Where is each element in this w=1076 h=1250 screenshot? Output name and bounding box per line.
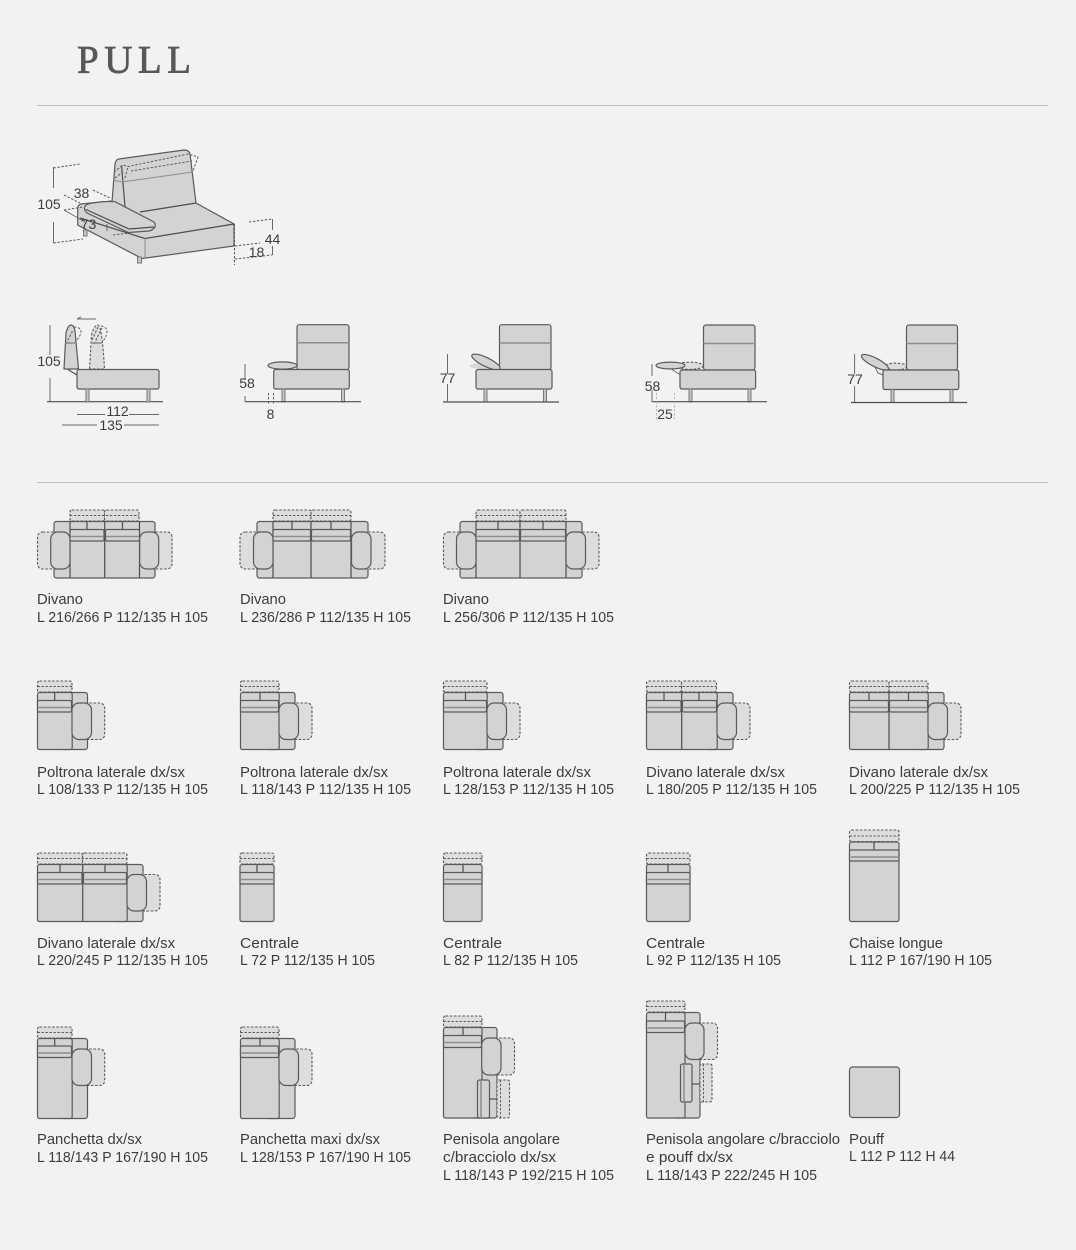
label: Poltrona laterale dx/sx: [240, 765, 389, 781]
side view 2: tray flat: 8: [267, 406, 275, 422]
dimensions: L 72 P 112/135 H 105: [240, 953, 375, 969]
side view 1: backrest movement: [37, 317, 163, 433]
plan: divano laterale 200: [850, 681, 961, 750]
item: Centrale 72: [240, 853, 375, 969]
label: Divano laterale dx/sx: [849, 765, 989, 781]
side view 4: tray extended: 25: [657, 406, 673, 422]
dimensions: L 220/245 P 112/135 H 105: [37, 953, 208, 969]
label line 2: c/bracciolo dx/sx: [443, 1150, 557, 1166]
dimension lines: [54, 167, 272, 255]
dimensions: L 112 P 167/190 H 105: [849, 953, 992, 969]
dimensions: L 236/286 P 112/135 H 105: [240, 610, 411, 626]
plan: centrale 72: [240, 853, 274, 922]
isometric view with dimensions: [37, 150, 280, 265]
side view 5: tray extended and tilted: [847, 325, 967, 402]
dimensions: L 118/143 P 112/135 H 105: [240, 782, 411, 798]
plan: divano 216: [38, 510, 172, 578]
label: Divano: [240, 592, 286, 608]
dimensions: L 180/205 P 112/135 H 105: [646, 782, 817, 798]
plan: centrale 92: [646, 853, 690, 922]
plan: panchetta: [38, 1027, 105, 1118]
label: Centrale: [443, 936, 502, 952]
side view 2: tray flat: 58: [239, 375, 255, 391]
plan: chaise longue: [850, 830, 899, 922]
isometric view with dimensions: 73: [81, 216, 96, 232]
label: Pouff: [849, 1132, 885, 1148]
item: Pouff: [849, 1067, 955, 1165]
label: Divano: [443, 592, 489, 608]
item: Panchetta: [37, 1027, 208, 1166]
plan: pouff: [850, 1067, 900, 1118]
item: Poltrona laterale 128: [443, 681, 614, 798]
item: Centrale 92: [646, 853, 781, 969]
plan: poltrona 118: [240, 681, 312, 750]
plan: poltrona 128: [444, 681, 520, 750]
item: Divano 216: [37, 510, 208, 626]
dimensions: L 216/266 P 112/135 H 105: [37, 610, 208, 626]
dimensions: L 200/225 P 112/135 H 105: [849, 782, 1020, 798]
item: Centrale 82: [443, 853, 578, 969]
label: Chaise longue: [849, 936, 943, 952]
label line 1: Penisola angolare c/bracciolo: [646, 1132, 840, 1148]
side view 3: tray tilted: [440, 325, 559, 402]
item: Divano laterale 220: [37, 853, 208, 969]
item: Poltrona laterale 118: [240, 681, 411, 798]
item: Poltrona laterale 108: [37, 681, 208, 798]
item: Divano laterale 180: [646, 681, 817, 798]
dimensions: L 92 P 112/135 H 105: [646, 953, 781, 969]
legs: [84, 230, 142, 263]
label: Panchetta dx/sx: [37, 1132, 143, 1148]
label: Poltrona laterale dx/sx: [37, 765, 186, 781]
dimensions: L 112 P 112 H 44: [849, 1149, 955, 1165]
plan: divano 236: [240, 510, 385, 578]
isometric view with dimensions: 38: [74, 185, 89, 201]
label: Panchetta maxi dx/sx: [240, 1132, 381, 1148]
plan: penisola angolare e pouff: [646, 1001, 718, 1118]
plan: divano 256: [444, 510, 599, 578]
plan: centrale 82: [444, 853, 482, 922]
item: Penisola angolare c/bracciolo e pouff: [646, 1001, 840, 1184]
item: Chaise longue: [849, 830, 992, 969]
dimensions: L 118/143 P 222/245 H 105: [646, 1168, 817, 1184]
label: Divano: [37, 592, 83, 608]
label line 1: Penisola angolare: [443, 1132, 560, 1148]
plan: poltrona 108: [38, 681, 105, 750]
dimensions: L 128/153 P 167/190 H 105: [240, 1150, 411, 1166]
dimensions: L 128/153 P 112/135 H 105: [443, 782, 614, 798]
plan: divano laterale 220: [38, 853, 160, 922]
side view 4: tray extended: [645, 325, 767, 422]
side view 1: backrest movement: 112: [106, 403, 129, 419]
dimensions: L 82 P 112/135 H 105: [443, 953, 578, 969]
item: Divano 256: [443, 510, 614, 626]
item: Penisola angolare c/bracciolo: [443, 1016, 614, 1184]
item: Divano 236: [240, 510, 411, 626]
plan: penisola angolare: [444, 1016, 514, 1118]
side view 5: tray extended and tilted: 77: [847, 371, 863, 387]
label line 2: e pouff dx/sx: [646, 1150, 734, 1166]
title: PULL: [77, 39, 191, 82]
side view 1: backrest movement: 135: [99, 417, 123, 433]
dimensions: L 118/143 P 167/190 H 105: [37, 1150, 208, 1166]
side view 1: backrest movement: 105: [37, 353, 61, 369]
side view 4: tray extended: 58: [645, 378, 660, 394]
isometric view with dimensions: 105: [37, 196, 61, 212]
item: Divano laterale 200: [849, 681, 1020, 798]
label: Poltrona laterale dx/sx: [443, 765, 592, 781]
label: Centrale: [646, 936, 705, 952]
item: Panchetta maxi: [240, 1027, 411, 1166]
dimensions: L 256/306 P 112/135 H 105: [443, 610, 614, 626]
dimensions: L 118/143 P 192/215 H 105: [443, 1168, 614, 1184]
label: Centrale: [240, 936, 299, 952]
label: Divano laterale dx/sx: [646, 765, 786, 781]
dimensions: L 108/133 P 112/135 H 105: [37, 782, 208, 798]
plan: panchetta maxi: [240, 1027, 312, 1118]
isometric view with dimensions: 18: [249, 244, 264, 260]
isometric view with dimensions: 44: [265, 231, 280, 247]
label: Divano laterale dx/sx: [37, 936, 176, 952]
side view 3: tray tilted: 77: [440, 370, 455, 386]
side view 2: tray flat: [239, 325, 361, 422]
plan: divano laterale 180: [646, 681, 750, 750]
